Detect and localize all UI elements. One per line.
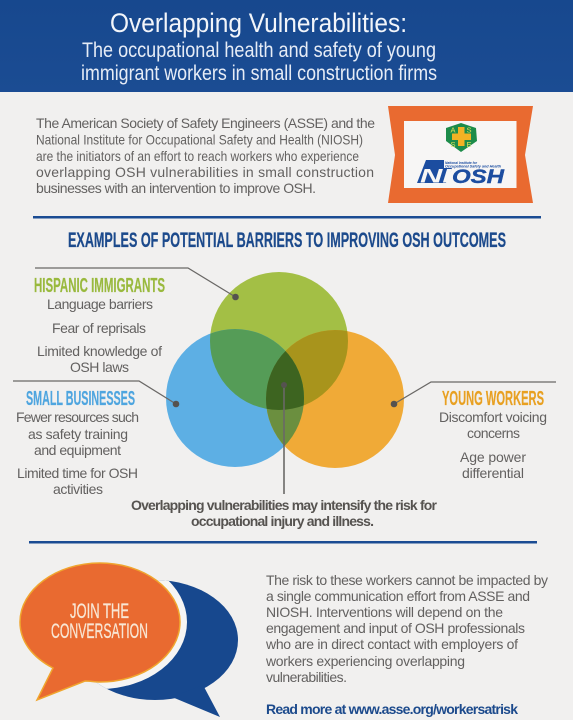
read more link: Read more at www.asse.org/workersatrisk <box>266 701 518 717</box>
icon: NIOSH logo: OSH <box>452 167 506 188</box>
subtitle: The occupational health and safety of young <box>82 39 436 62</box>
panel: Hispanic immigrants: Limited knowledge of <box>37 343 162 359</box>
closing paragraph: a single communication effort from ASSE and <box>266 588 530 604</box>
intro paragraph: The American Society of Safety Engineers (ASSE) and the <box>36 115 375 131</box>
icon: ASSE shield logo: S <box>466 126 472 134</box>
bubble label: JOIN THE <box>70 600 129 623</box>
icon: NIOSH logo <box>417 160 506 188</box>
panel: small businesses: and equipment <box>34 442 121 458</box>
icon: ASSE shield logo: A <box>450 126 456 134</box>
closing paragraph: workers experiencing overlapping <box>265 653 465 669</box>
panel: Hispanic immigrants <box>34 275 165 375</box>
closing paragraph: who are in direct contact with employers of <box>265 636 518 652</box>
icon: NIOSH logo: National Institute for <box>445 161 478 165</box>
speech bubbles <box>13 555 238 717</box>
intro paragraph: National Institute for Occupational Safety and Health (NIOSH) <box>36 132 363 148</box>
callout lines <box>13 268 556 494</box>
panel: small businesses <box>16 388 139 497</box>
panel: Hispanic immigrants: Language barriers <box>47 296 153 312</box>
panel: young workers: Age power <box>460 449 526 465</box>
icon: orange speech bubble <box>20 563 180 700</box>
panel: small businesses: Fewer resources such <box>16 409 139 425</box>
closing paragraph: engagement and input of OSH professionals <box>266 620 525 636</box>
panel: small businesses: Limited time for OSH <box>17 465 138 481</box>
icon: NIOSH logo: Occupational Safety and Health <box>445 164 501 168</box>
icon: ASSE shield logo: S <box>450 140 456 149</box>
overlap statement: occupational injury and illness. <box>191 513 374 529</box>
overlap statement: Overlapping vulnerabilities may intensify the risk for <box>131 497 438 513</box>
subtitle: immigrant workers in small construction firms <box>81 62 437 85</box>
logo panel <box>388 106 533 203</box>
closing paragraph: NIOSH. Interventions will depend on the <box>266 604 503 620</box>
subtitle <box>81 39 437 85</box>
icon: ASSE shield logo: E <box>466 140 472 149</box>
intro paragraph: overlapping OSH vulnerabilities in small construction <box>36 164 374 180</box>
title: Overlapping Vulnerabilities: <box>110 8 407 38</box>
intro paragraph <box>36 115 375 196</box>
bubble label: CONVERSATION <box>51 620 148 643</box>
panel: small businesses: as safety training <box>28 426 128 442</box>
venn diagram <box>166 272 404 468</box>
panel: Hispanic immigrants: Fear of reprisals <box>52 320 146 336</box>
closing paragraph: The risk to these workers cannot be impacted by <box>266 572 548 588</box>
panel: young workers: Discomfort voicing <box>439 409 547 425</box>
icon: ASSE shield logo <box>446 123 477 152</box>
icon: NIOSH logo: NI <box>420 166 452 188</box>
heading: small businesses: SMALL BUSINESSES <box>26 388 135 410</box>
closing paragraph <box>265 572 548 685</box>
bubble label <box>51 600 148 643</box>
panel: young workers: differential <box>462 465 524 481</box>
icon: blue speech bubble <box>72 580 238 717</box>
closing paragraph: vulnerabilities. <box>266 669 347 685</box>
callout dots <box>173 294 397 407</box>
header banner <box>0 0 573 92</box>
panel: Hispanic immigrants: OSH laws <box>70 359 129 375</box>
overlap statement <box>131 497 438 529</box>
panel: young workers <box>439 388 547 481</box>
panel: young workers: concerns <box>467 425 520 441</box>
panel: small businesses: activities <box>53 481 103 497</box>
intro paragraph: businesses with an intervention to improve OSH. <box>36 180 316 196</box>
heading: Hispanic immigrants: HISPANIC IMMIGRANTS <box>34 275 165 297</box>
intro paragraph: are the initiators of an effort to reach workers who experience <box>36 148 359 164</box>
